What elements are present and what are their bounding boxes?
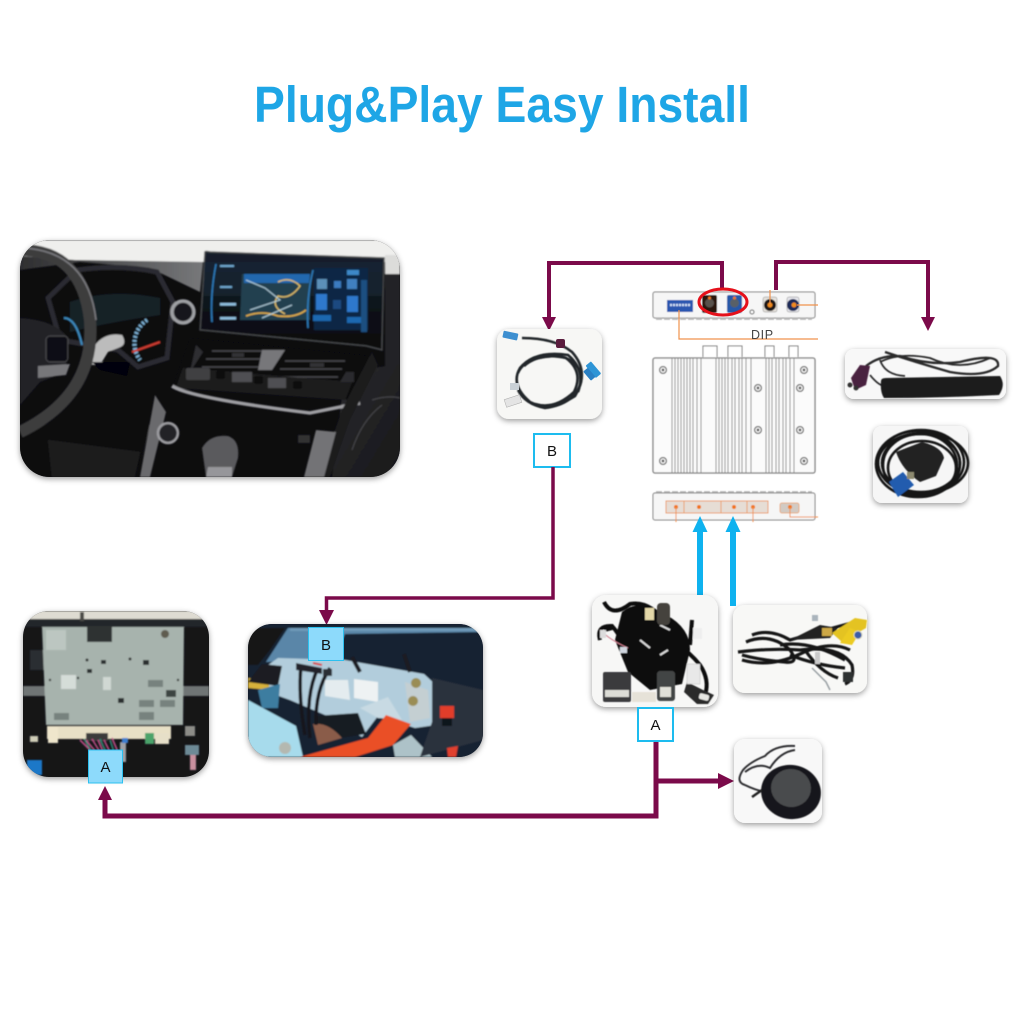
gear lever and knob	[140, 395, 166, 477]
right panel	[420, 678, 483, 757]
label: A outline box: A	[650, 717, 661, 734]
red highlight ellipse	[699, 289, 747, 315]
cluster hood	[48, 267, 173, 367]
metal plate	[42, 627, 184, 725]
photo: main wiring harness	[592, 595, 718, 707]
arrow: maroon line to cable B	[542, 263, 722, 331]
connector strip	[47, 726, 171, 739]
label: B outline box	[534, 434, 570, 467]
arrow: blue arrow up to port 2	[726, 516, 740, 606]
centre console vents	[172, 338, 372, 400]
DIP label: DIP	[751, 328, 774, 342]
label: B filled box on vehicle module: B	[321, 637, 331, 654]
start knob	[172, 301, 194, 323]
photo: LVDS cable	[497, 329, 602, 419]
label: A filled box on vehicle connector: A	[100, 759, 111, 776]
photo: car dashboard with touch screen	[20, 240, 400, 477]
climate buttons	[176, 368, 352, 400]
label: B outline box: B	[547, 443, 557, 460]
wiring	[78, 737, 119, 750]
screen	[200, 252, 384, 350]
arrow: line from A box to vehicle connector A	[98, 742, 656, 816]
arrow: branch from A line to microphone	[656, 773, 734, 789]
arrow: maroon line to antennas	[776, 262, 935, 331]
stalk	[92, 334, 124, 365]
photo: antenna	[845, 349, 1006, 399]
photo: microphone puck	[734, 739, 825, 824]
arrow: blue arrow up to port 1	[692, 516, 708, 606]
module diagram	[653, 289, 818, 522]
photo: RCA and USB harness	[733, 605, 867, 693]
DIP leader line	[679, 290, 818, 339]
module top panel with connectors	[653, 292, 815, 319]
photo: vehicle head unit rear (A)	[23, 611, 209, 777]
label: B filled box on vehicle module	[308, 628, 344, 660]
red tape	[300, 715, 411, 757]
label: A filled box on vehicle connector	[88, 750, 122, 783]
photo: vehicle module bay (B)	[248, 624, 483, 757]
label: A outline box	[638, 708, 673, 741]
arrow: line from B box to vehicle connector B	[319, 467, 553, 625]
infographic canvas	[16, 85, 1010, 829]
photo: GPS antenna	[873, 426, 968, 503]
module body with fins	[653, 346, 815, 473]
title: Plug&Play Easy Install	[254, 76, 750, 133]
steering wheel	[20, 250, 90, 432]
module bottom panel with ports	[653, 492, 818, 522]
